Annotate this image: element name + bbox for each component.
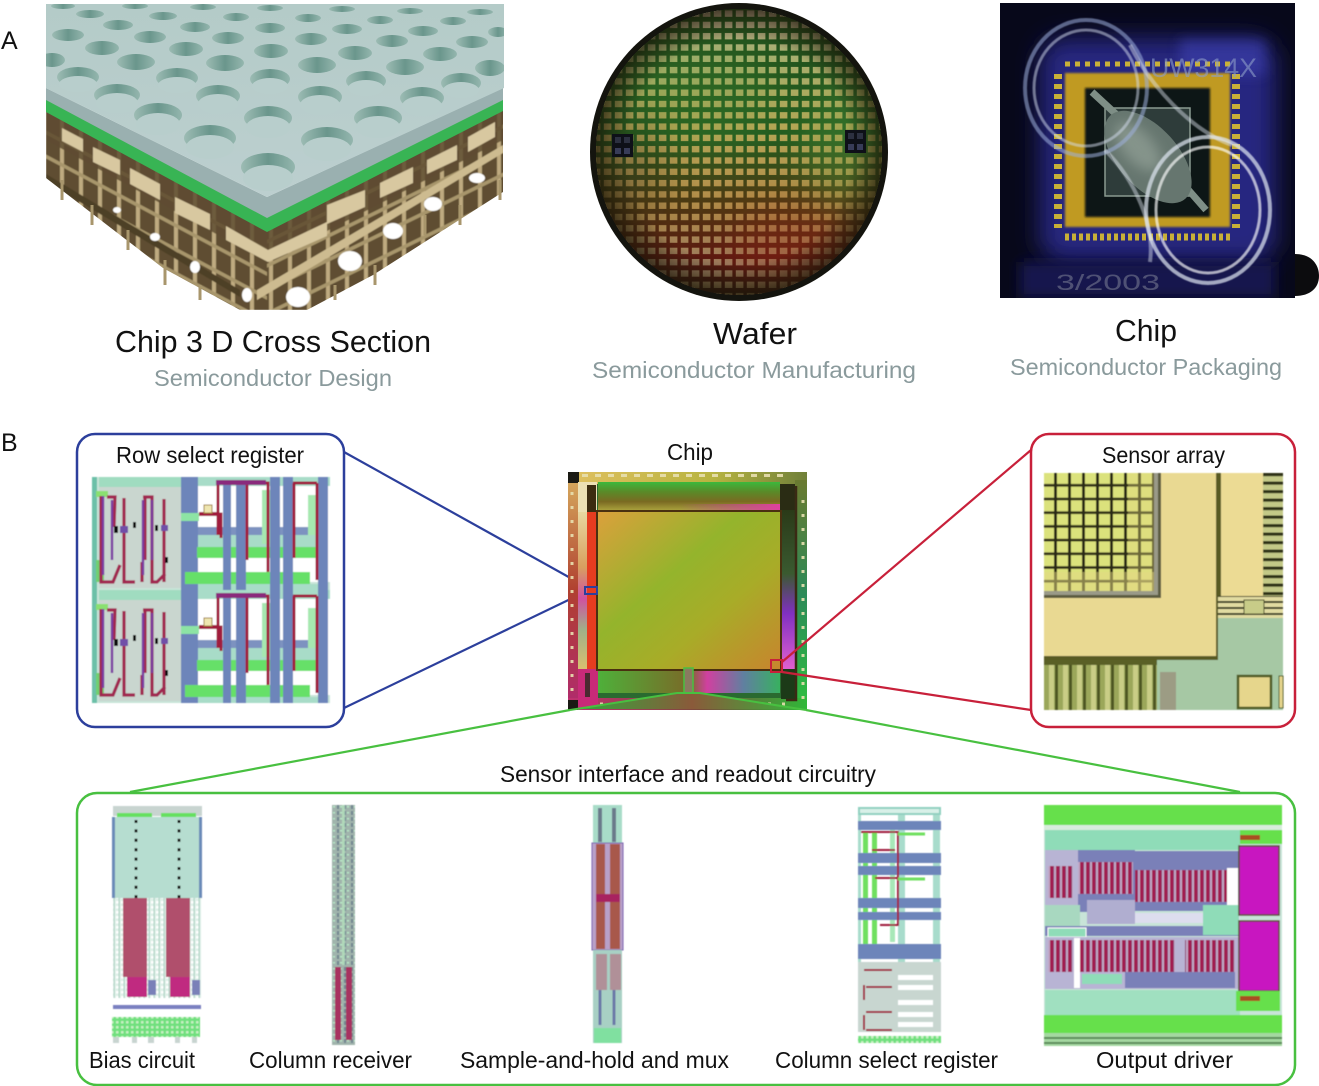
- icon: chip package bump: [1295, 254, 1319, 296]
- panel: sensor interface and readout circuitry: [77, 793, 1295, 1085]
- heading: row select register: Row select register: [116, 442, 304, 468]
- connector: blue zoom lines: [344, 452, 597, 708]
- label: column receiver: Column receiver: [249, 1047, 412, 1073]
- microchannel: [1092, 92, 1206, 210]
- panel: sensor array: [1031, 434, 1295, 727]
- layout: output driver: [1044, 805, 1282, 1046]
- heading: sensor interface and readout circuitry: Sensor interface and readout circuitry: [500, 761, 876, 787]
- label: output driver: Output driver: [1096, 1047, 1233, 1073]
- layout: column select register: [858, 807, 941, 1043]
- gold pads: [1058, 64, 1236, 237]
- gold frame: [1065, 73, 1230, 227]
- selection box: row select: [585, 587, 597, 594]
- slab side: [46, 88, 503, 218]
- image: chip die: [568, 472, 807, 710]
- caption: semiconductor packaging: Semiconductor Packaging: [1010, 354, 1282, 380]
- image: chip 3D cross section: [39, 3, 508, 310]
- package date: 3/2003: [1056, 270, 1160, 295]
- label: column select register: Column select register: [775, 1047, 998, 1073]
- layout: bias circuit: [112, 806, 202, 1043]
- die cavity: [1085, 88, 1210, 217]
- label: panel B: B: [1, 429, 18, 457]
- wafer alignment die right: [845, 130, 866, 153]
- layout: row select register: [92, 477, 330, 703]
- image: wafer: [590, 0, 895, 304]
- lattice structure below the slab: [46, 100, 504, 310]
- green layer: [46, 99, 503, 232]
- layout: sample-and-hold and mux: [592, 805, 623, 1043]
- label: bias circuit: Bias circuit: [89, 1047, 196, 1073]
- heading: sensor array: Sensor array: [1102, 442, 1225, 468]
- slab top with holes: [39, 3, 508, 197]
- heading: chip die: Chip: [667, 439, 713, 465]
- layout: column receiver: [332, 805, 355, 1045]
- wafer alignment die left: [612, 134, 633, 157]
- caption: semiconductor manufacturing: Semiconductor Manufacturing: [592, 357, 916, 383]
- heading: wafer: Wafer: [713, 316, 797, 351]
- bond pads: [572, 476, 803, 704]
- connector: red zoom lines: [782, 450, 1031, 710]
- caption: semiconductor design: Semiconductor Design: [154, 365, 392, 391]
- lattice feet: [62, 180, 500, 300]
- image: packaged chip: [1000, 3, 1295, 298]
- heading: chip 3D cross section: Chip 3 D Cross Section: [115, 324, 431, 359]
- panel: row select register: [77, 434, 344, 727]
- micrograph: sensor array: [1044, 473, 1283, 710]
- package marking: UW314X: [1150, 53, 1257, 83]
- connector: green zoom lines: [130, 710, 1240, 792]
- selection box: sensor array: [771, 660, 782, 672]
- label: panel A: A: [1, 27, 18, 55]
- heading: chip: Chip: [1115, 313, 1177, 348]
- label: sample-and-hold and mux: Sample-and-hold and mux: [460, 1047, 729, 1073]
- glass rings: [1025, 20, 1270, 283]
